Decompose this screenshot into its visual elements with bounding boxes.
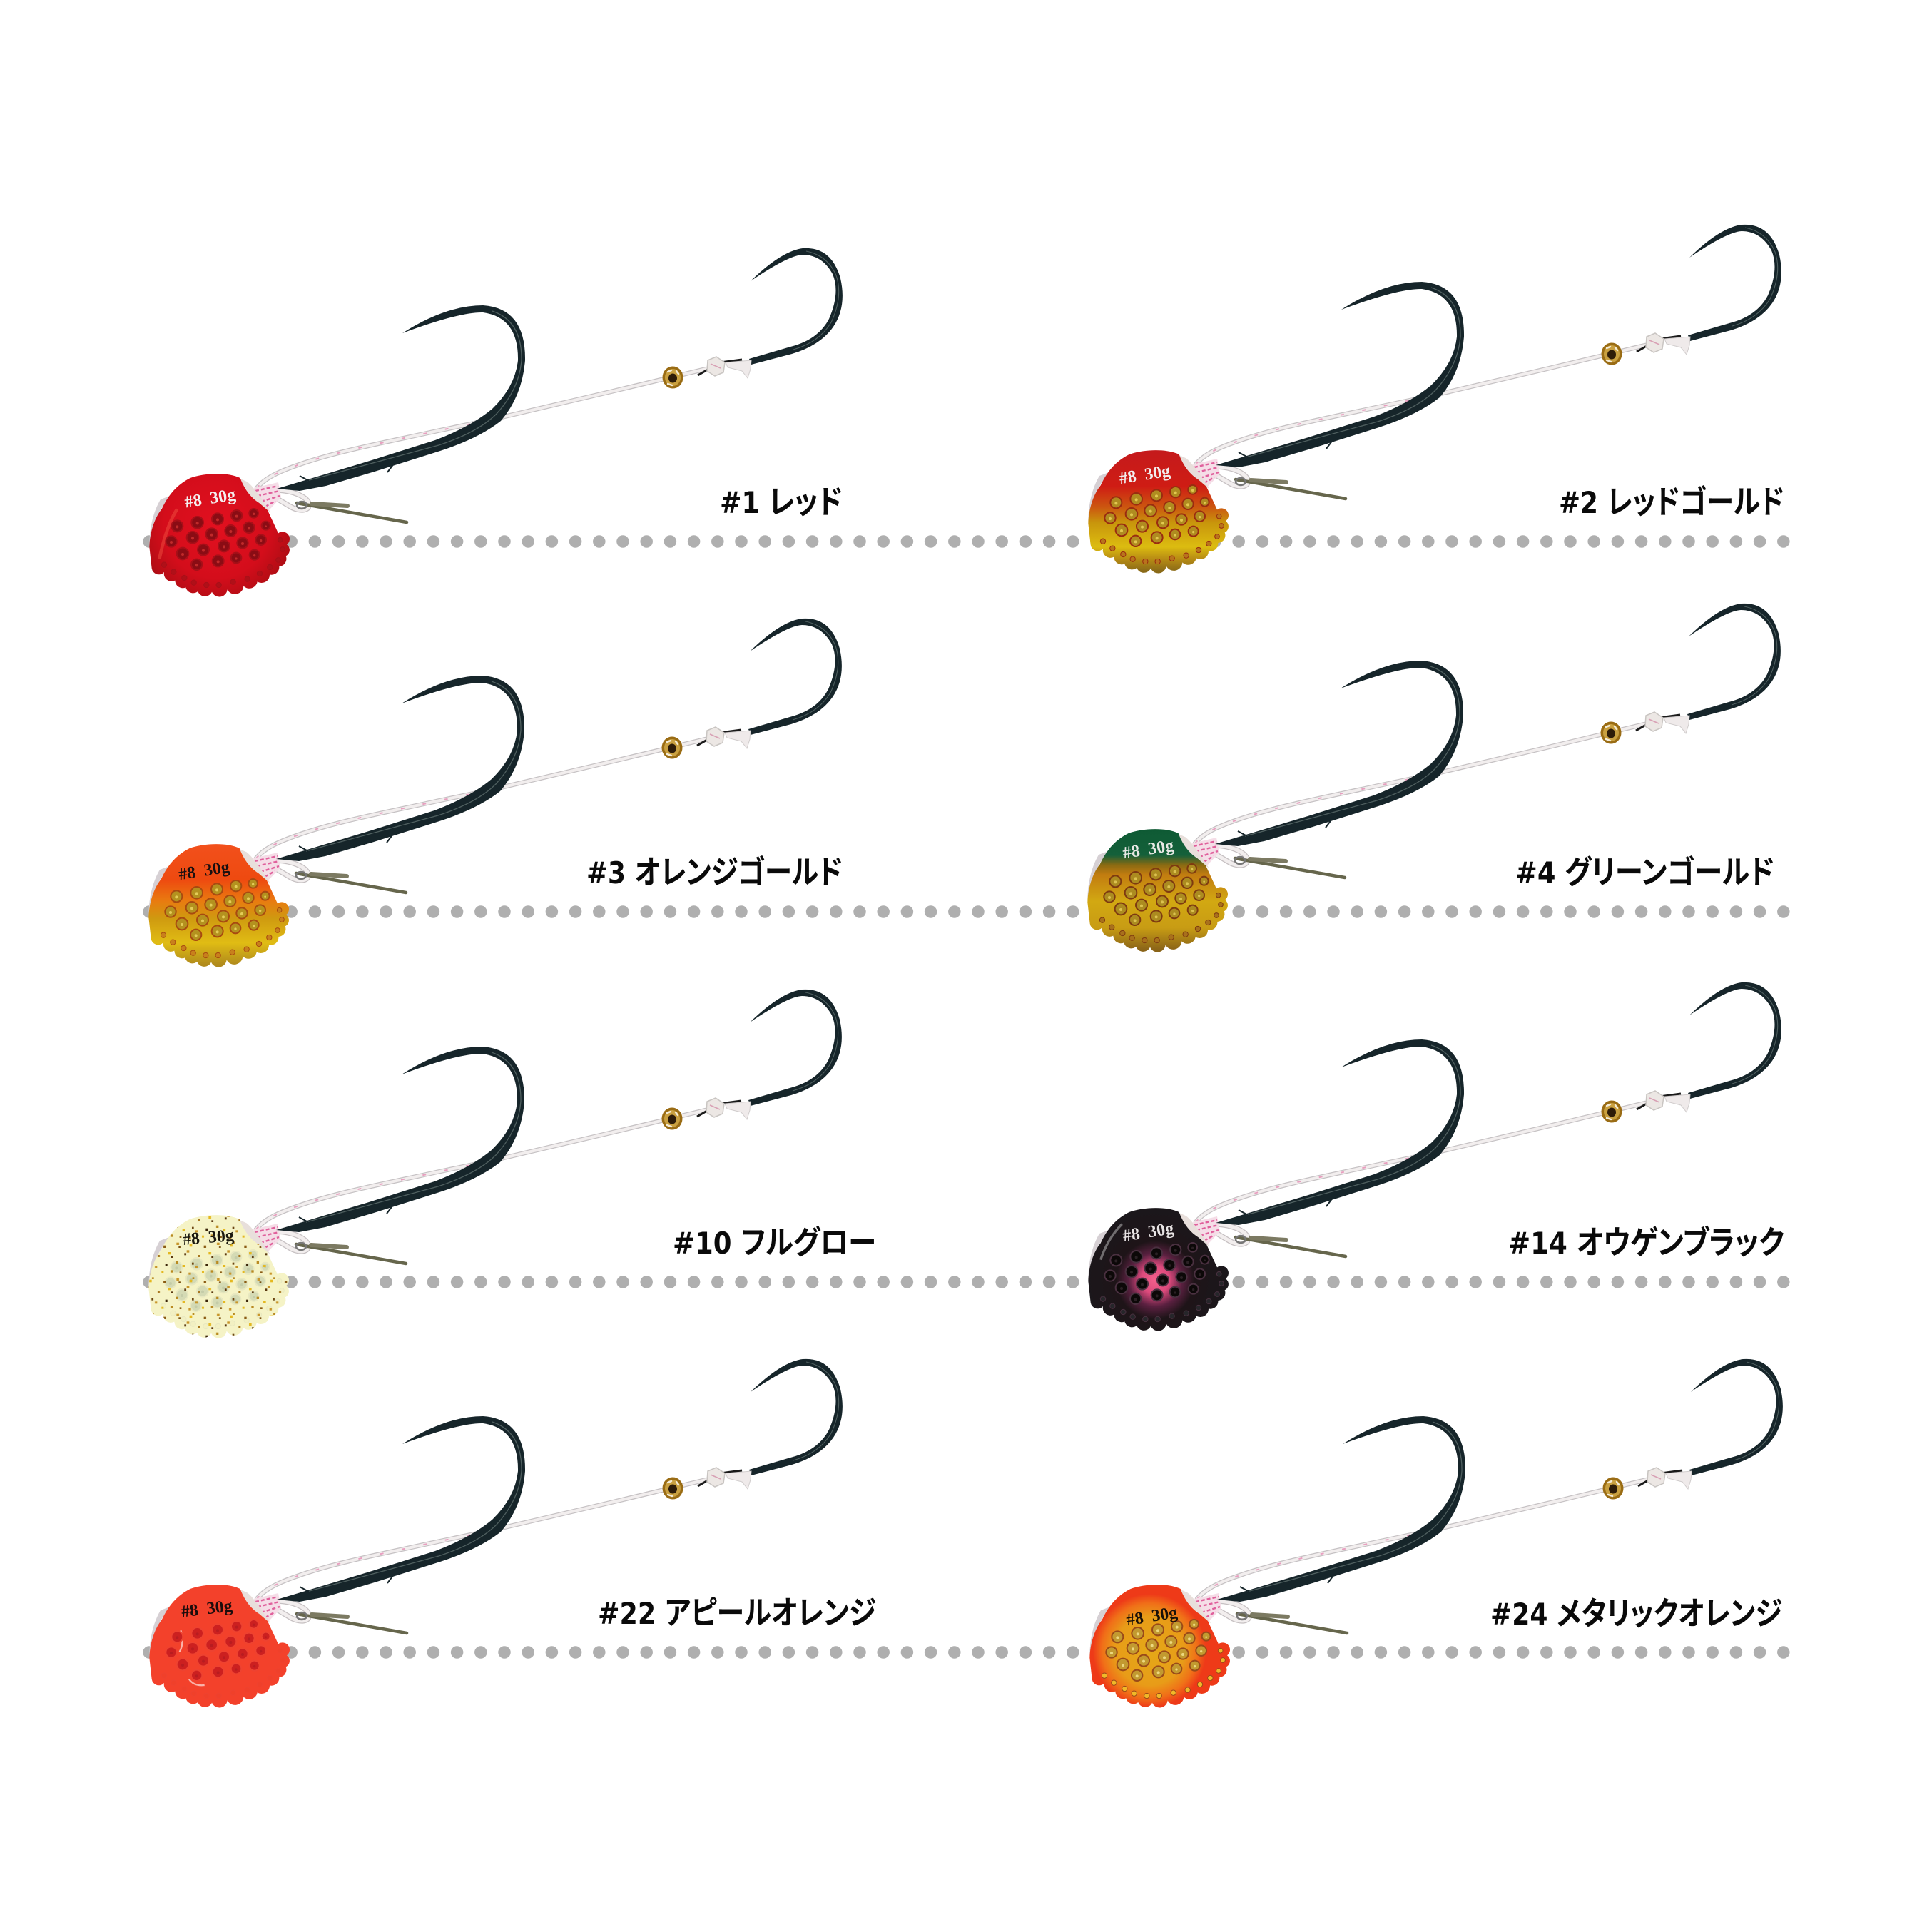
dotted rule row 2 [149, 905, 1784, 918]
lead head: red [149, 474, 290, 596]
dotted rule row 3 [149, 1276, 1784, 1288]
hooks and thread [1192, 604, 1781, 878]
lead head: red: #830g [183, 486, 237, 512]
lure #3 orange gold [148, 619, 842, 967]
lure #24 metallic orange [1089, 1359, 1783, 1707]
lead head: red gold: #830g [1118, 462, 1171, 488]
dotted rule row 4 [149, 1646, 1784, 1659]
hooks and thread [1194, 1359, 1783, 1633]
label #2: #2 レッドゴールド [1559, 476, 1784, 522]
dotted rule row 1 [149, 535, 1784, 548]
lead head: orange gold [148, 844, 289, 967]
lead head: green gold: #830g [1122, 836, 1175, 863]
lead head: ougen black [1088, 1208, 1229, 1331]
label #24: #24 メタリックオレンジ [1490, 1587, 1782, 1634]
lure #4 green gold [1087, 604, 1781, 952]
label #10: #10 フルグロー [673, 1216, 876, 1263]
lure #1 red [149, 248, 843, 596]
lure #2 red gold [1088, 225, 1781, 573]
lead head: ougen black: #830g [1122, 1219, 1175, 1246]
lead head: appeal orange: #830g [181, 1597, 233, 1622]
lead head: appeal orange [149, 1585, 290, 1707]
label #22: #22 アピールオレンジ [598, 1587, 876, 1633]
hooks and thread [1193, 982, 1781, 1256]
label #1: #1 レッド [720, 476, 843, 522]
lead head: orange gold: #830g [178, 858, 231, 884]
hooks and thread [253, 619, 842, 893]
lead head: full glow: #830g [182, 1226, 235, 1249]
label #4: #4 グリーンゴールド [1515, 846, 1774, 893]
hooks and thread [254, 1359, 843, 1633]
lead head: full glow [148, 1215, 289, 1338]
label #14: #14 オウゲンブラック [1508, 1216, 1784, 1263]
lure #22 appeal orange [149, 1359, 843, 1707]
label #3: #3 オレンジゴールド [586, 846, 843, 893]
lure #10 full glow [148, 990, 842, 1338]
hooks and thread [253, 990, 842, 1264]
lure #14 ougen black [1088, 982, 1781, 1331]
hooks and thread [1193, 225, 1781, 499]
lead head: red gold [1088, 450, 1229, 573]
lead head: metallic orange [1089, 1585, 1230, 1707]
lead head: green gold [1087, 829, 1228, 952]
lead head: metallic orange: #830g [1125, 1603, 1179, 1630]
hooks and thread [254, 248, 843, 522]
